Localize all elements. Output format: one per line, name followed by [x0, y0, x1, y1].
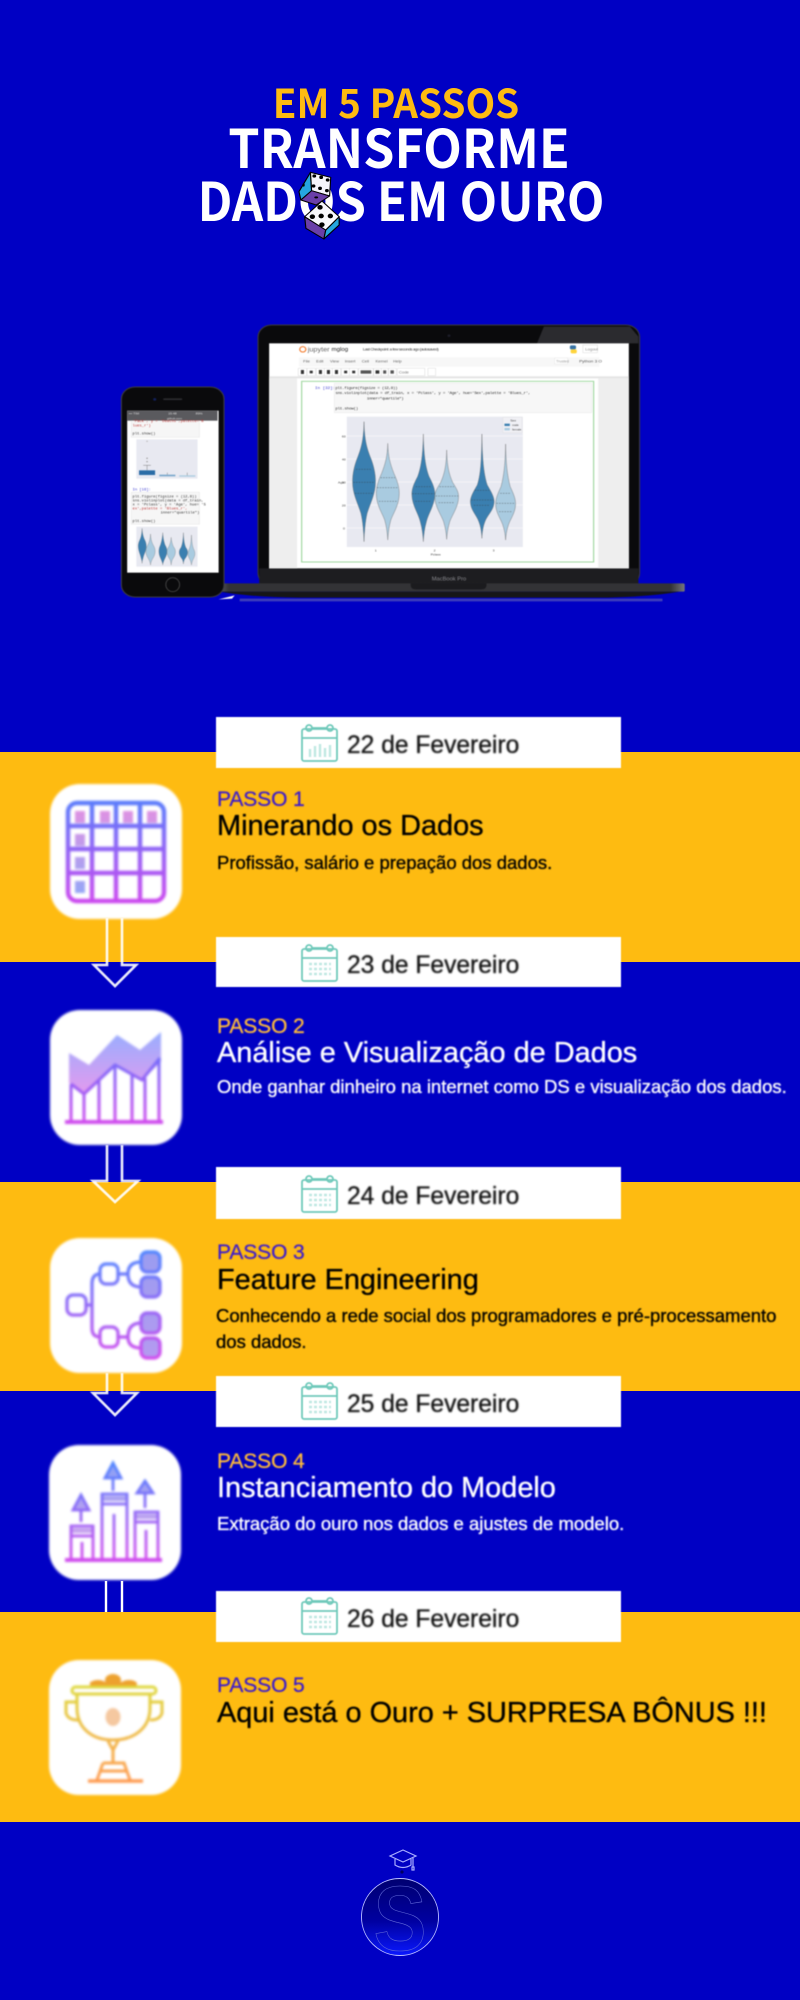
step description: Extração do ouro nos dados e ajustes de modelo. — [217, 1513, 624, 1534]
date bar: 25 — [216, 1376, 621, 1427]
jupyter screen: inner="quartile") — [367, 397, 404, 401]
icon card: step 3 tree — [50, 1238, 182, 1373]
violin plot — [338, 417, 523, 557]
date bar: 23 — [216, 937, 621, 987]
icon: graduation cap — [390, 1850, 416, 1870]
phone: lues_r') — [133, 424, 151, 429]
date bar: 22: 22 de Fevereiro — [347, 732, 519, 759]
band: step 3 — [0, 1182, 800, 1391]
jupyter screen: Edit — [316, 359, 324, 363]
date bar: 22 — [216, 717, 621, 768]
icon: calendar 22 — [300, 724, 339, 763]
violin plot: Age — [338, 481, 344, 484]
phone: github.com — [167, 417, 183, 420]
notebook cell — [302, 381, 594, 562]
phone: plt.show() — [133, 432, 155, 437]
jupyter screen: Kernel — [376, 359, 388, 363]
phone: x = 'Pclass', y = 'Age', hue= 'S — [133, 503, 206, 508]
jupyter screen: View — [330, 359, 339, 363]
violin plot: 40 — [342, 458, 346, 461]
violin plot: Pclass — [431, 553, 441, 557]
jupyter screen: Last Checkpoint: a few seconds ago (autosaved) — [363, 347, 439, 351]
violin plot: 1 — [375, 549, 377, 552]
icon: calendar 26 — [300, 1596, 339, 1636]
laptop — [215, 325, 685, 601]
phone: inner="quartile") — [160, 511, 199, 516]
devices: laptop and phone — [120, 324, 686, 602]
date bar: 24 — [216, 1167, 621, 1219]
phone: 'Pack', y = 'Deaths',palette='B — [133, 419, 204, 424]
band: step 1 — [0, 752, 800, 962]
arrow: step 2 to 3 — [90, 1144, 142, 1204]
phone: In [16]: — [133, 488, 151, 492]
phone: 89% — [196, 412, 203, 416]
date bar: 24: 24 de Fevereiro — [347, 1183, 519, 1210]
violin plot: 20 — [342, 504, 346, 507]
icon card: step 1 table — [50, 784, 182, 919]
jupyter screen — [269, 343, 629, 568]
jupyter screen: Trusted — [556, 360, 569, 363]
violin plot: Sex — [510, 419, 517, 422]
jupyter screen: Insert — [345, 359, 356, 363]
jupyter screen: Logout — [585, 347, 599, 351]
jupyter screen: In [32]: — [315, 386, 335, 391]
title line: transforme: TRANSFORME — [228, 108, 570, 184]
step description: Profissão, salário e prepação dos dados. — [217, 852, 552, 873]
phone: plt.figure(figsize = (12,8)) — [133, 495, 197, 499]
jupyter screen: Help — [393, 359, 403, 363]
step heading: Instanciamento do Modelo — [217, 1472, 556, 1504]
laptop: MacBook Pro — [432, 577, 466, 583]
violin plot: female — [512, 428, 522, 431]
title line: dados em ouro: DADOS EM OURO — [198, 161, 604, 237]
icon: calendar 25 — [300, 1382, 339, 1421]
step label: PASSO 1 — [217, 788, 305, 811]
jupyter screen: plt.show() — [335, 407, 358, 412]
icon: calendar 24 — [300, 1174, 339, 1214]
violin plot: 60 — [342, 435, 346, 438]
step label: PASSO 2 — [217, 1015, 305, 1038]
date bar: 23: 23 de Fevereiro — [347, 952, 519, 979]
jupyter screen: jupyter — [307, 347, 330, 353]
phone: plt.show() — [133, 519, 155, 524]
arrow: step 3 to 4 — [90, 1372, 140, 1418]
title — [198, 72, 604, 237]
phone: sns.violinplot(data = df_train, — [133, 499, 204, 503]
phone — [121, 387, 224, 597]
icon card: step 4 growth bars — [49, 1445, 181, 1580]
violin plot: male — [512, 423, 519, 427]
step label: PASSO 3 — [217, 1241, 305, 1264]
step 1 text — [217, 788, 552, 874]
date bar: 26 — [216, 1591, 621, 1642]
jupyter screen: File — [303, 359, 311, 363]
icon: dice — [298, 172, 340, 240]
jupyter screen: Code — [399, 370, 410, 374]
connector: step 4 to 5 — [104, 1581, 124, 1612]
step description: dos dados. — [216, 1331, 307, 1352]
date bar: 25: 25 de Fevereiro — [347, 1391, 519, 1418]
step heading: Aqui está o Ouro + SURPRESA BÔNUS !!! — [217, 1697, 767, 1729]
step description: Onde ganhar dinheiro na internet como DS e visualização dos dados. — [217, 1076, 787, 1097]
step description — [216, 1305, 777, 1352]
icon card: step 2 area chart — [50, 1010, 182, 1145]
jupyter screen: plt.figure(figsize = (12,8)) — [335, 386, 398, 391]
step 2 text — [216, 1015, 787, 1098]
violin plot: 3 — [493, 549, 495, 552]
violin plot: 2 — [434, 549, 436, 552]
jupyter screen: sns.violinplot(data = df_train, x = 'Pclass', y = 'Age', hue='Sex',palette = 'Blues_r', — [335, 391, 530, 396]
band: step 5 — [0, 1612, 800, 1822]
jupyter screen: Python 3 O — [579, 359, 603, 364]
logo circle with S: S — [374, 1867, 426, 1970]
icon: calendar 23 — [300, 944, 339, 983]
step 3 text — [216, 1241, 777, 1352]
step description: Conhecendo a rede social dos programadores e pré-processamento — [216, 1305, 776, 1326]
step label: PASSO 5 — [217, 1674, 305, 1697]
phone: ex',palette = 'Blues_r', — [133, 507, 187, 512]
jupyter screen: mglog — [332, 347, 348, 353]
icon card: step 5 trophy — [49, 1660, 181, 1795]
step heading: Minerando os Dados — [217, 810, 484, 842]
phone: 15:48 — [168, 412, 177, 416]
arrow: step 1 to 2 — [90, 918, 140, 988]
step label: PASSO 4 — [217, 1450, 305, 1473]
phone: ••• TIM — [129, 412, 139, 416]
subtitle: em 5 passos: EM 5 PASSOS — [273, 72, 519, 130]
step heading: Feature Engineering — [217, 1264, 479, 1296]
step 4 text — [217, 1450, 624, 1536]
date bar: 26: 26 de Fevereiro — [347, 1606, 519, 1633]
logo circle with S — [362, 1867, 438, 1970]
step 5 text — [216, 1674, 767, 1730]
step heading: Análise e Visualização de Dados — [217, 1037, 637, 1069]
laptop base — [215, 583, 685, 592]
jupyter screen: Cell — [362, 359, 369, 363]
violin plot: 30 — [342, 481, 346, 484]
violin plot: 0 — [343, 527, 345, 530]
logo footer — [361, 1849, 439, 1970]
